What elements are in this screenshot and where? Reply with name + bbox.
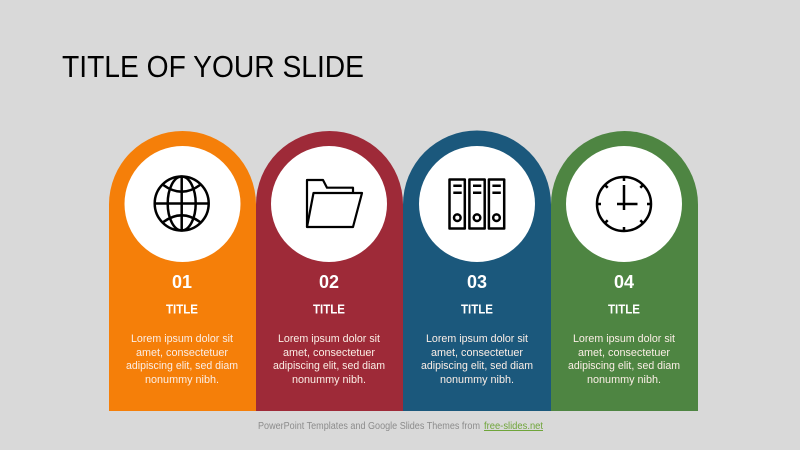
text block 2: nonummy nibh. [292, 374, 366, 386]
heading: title 4: TITLE [608, 302, 640, 316]
text block 4: amet, consectetuer [578, 347, 670, 359]
icon: globe [124, 146, 240, 262]
footer credit: free-slides.net [484, 421, 543, 432]
heading: title 2: TITLE [313, 302, 345, 316]
text block 4: Lorem ipsum dolor sit [573, 333, 675, 345]
number 03: 03 [467, 272, 487, 292]
text block 1: nonummy nibh. [145, 374, 219, 386]
text block 3 [421, 333, 533, 386]
text block 2: Lorem ipsum dolor sit [278, 333, 380, 345]
panel: 03 blue [403, 130, 551, 411]
text block 2: amet, consectetuer [283, 347, 375, 359]
text block 2 [273, 333, 385, 386]
text block 3: adipiscing elit, sed diam [421, 360, 533, 372]
text block 1: Lorem ipsum dolor sit [131, 333, 233, 345]
panel: 02 red [256, 131, 403, 411]
heading: title 3: TITLE [461, 302, 493, 316]
text block 1 [126, 333, 238, 386]
panel: 01 orange [109, 131, 256, 411]
text block 3: nonummy nibh. [440, 374, 514, 386]
title: TITLE OF YOUR SLIDE [62, 49, 364, 84]
text block 2: adipiscing elit, sed diam [273, 360, 385, 372]
text block 4: nonummy nibh. [587, 374, 661, 386]
panel: 04 green [551, 131, 698, 411]
text block 1: amet, consectetuer [136, 347, 228, 359]
number 02: 02 [319, 272, 339, 292]
footer credit: PowerPoint Templates and Google Slides Themes from [258, 421, 480, 432]
text block 3: Lorem ipsum dolor sit [426, 333, 528, 345]
number 01: 01 [172, 272, 192, 292]
icon: binders [419, 146, 535, 262]
text block 4: adipiscing elit, sed diam [568, 360, 680, 372]
text block 1: adipiscing elit, sed diam [126, 360, 238, 372]
heading: title 1: TITLE [166, 302, 198, 316]
text block 4 [568, 333, 680, 386]
number 04: 04 [614, 272, 634, 292]
icon: folder [271, 146, 387, 262]
text block 3: amet, consectetuer [431, 347, 523, 359]
icon: clock [566, 146, 682, 262]
